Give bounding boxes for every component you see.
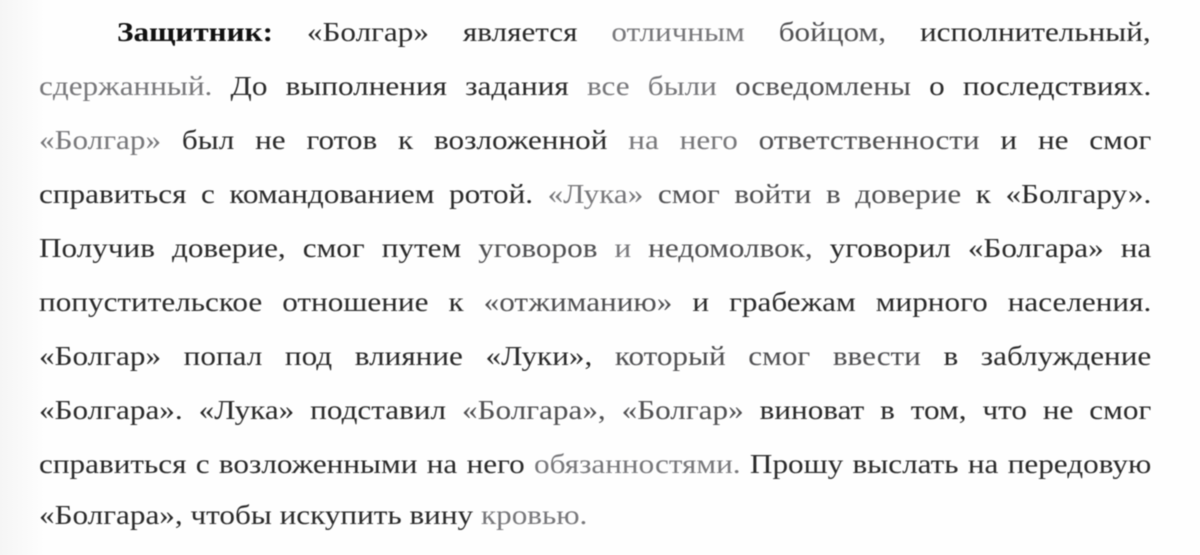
text line 6: попустительское отношение к «отжиманию» и грабежам мирного населения. — [39, 287, 1151, 317]
text line 3: «Болгар» был не готов к возложенной на него ответственности и не смог — [39, 125, 1151, 155]
text line 2: сдержанный. До выполнения задания все были осведомлены о последствиях. — [39, 71, 1151, 101]
text line 10: «Болгара», чтобы искупить вину кровью. — [39, 500, 587, 530]
text line 9: справиться с возложенными на него обязанностями. Прошу выслать на передовую — [39, 449, 1151, 479]
text line 4: справиться с командованием ротой. «Лука» смог войти в доверие к «Болгару». — [39, 179, 1151, 209]
text line 1 with bold heading: Защитник: «Болгар» является отличным бойцом, исполнительный, — [117, 17, 1151, 47]
text line 8: «Болгара». «Лука» подставил «Болгара», «Болгар» виноват в том, что не смог — [39, 395, 1151, 425]
text line 5: Получив доверие, смог путем уговоров и недомолвок, уговорил «Болгара» на — [39, 233, 1151, 263]
text line 7: «Болгар» попал под влияние «Луки», который смог ввести в заблуждение — [39, 341, 1151, 371]
